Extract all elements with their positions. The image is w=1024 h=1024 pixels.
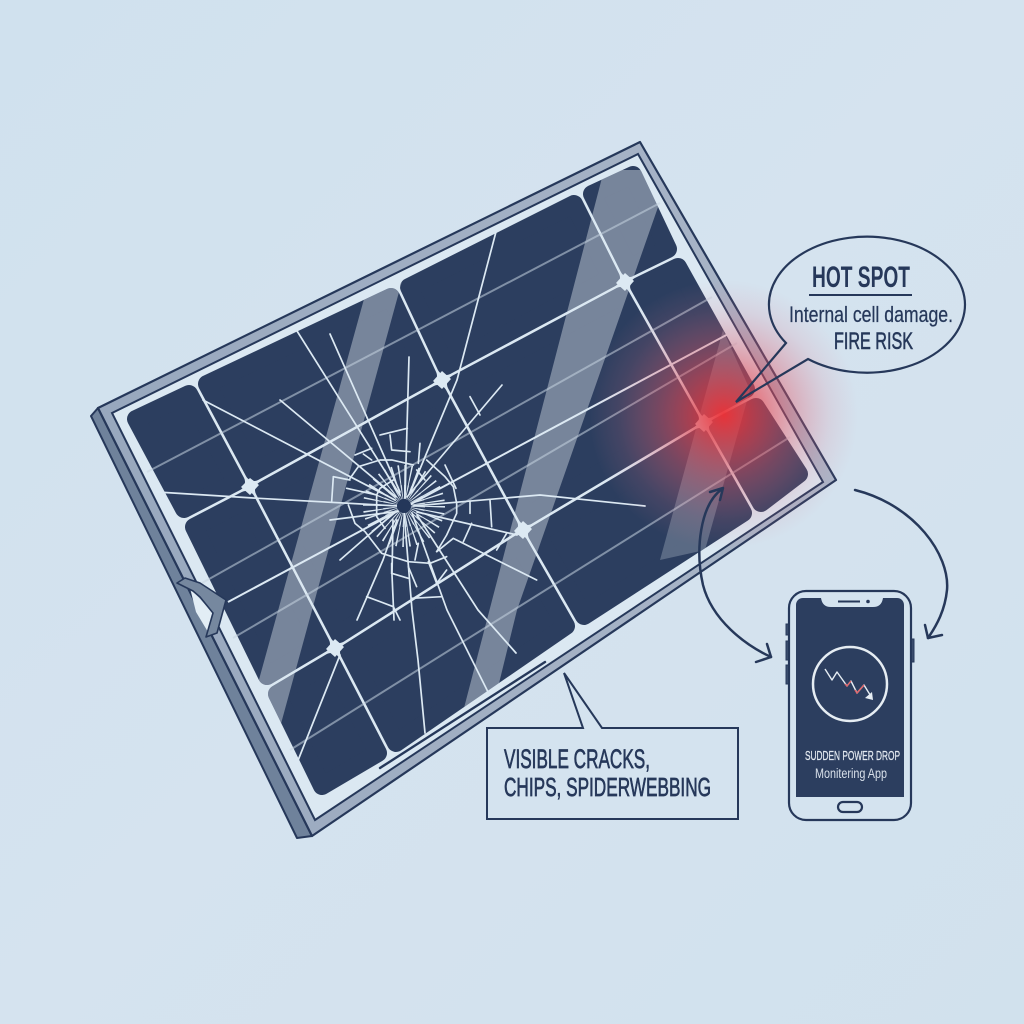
solar cells bbox=[136, 175, 799, 786]
bright conductor line bbox=[228, 332, 732, 602]
monitoring app label: Monitering App bbox=[815, 766, 887, 781]
falling power line bbox=[825, 669, 872, 698]
impact hole bbox=[397, 499, 411, 513]
arrow head bbox=[865, 692, 873, 700]
arrow: phone and panel two-way bbox=[699, 488, 771, 662]
spiderweb crack rings bbox=[332, 397, 537, 620]
phone body bbox=[789, 591, 911, 820]
label text line 2: CHIPS, SPIDERWEBBING bbox=[504, 772, 711, 802]
panel frame bbox=[98, 142, 836, 836]
speaker and camera bbox=[838, 600, 870, 603]
power drop gauge bbox=[813, 647, 887, 721]
phone side buttons bbox=[786, 624, 914, 684]
panel glass face bbox=[112, 154, 823, 820]
impact radial cracks bbox=[380, 482, 428, 530]
phone screen bbox=[796, 598, 904, 797]
red drop segment lower bbox=[855, 685, 864, 693]
cell junction nodes bbox=[241, 273, 713, 657]
arrow: panel to phone bbox=[855, 490, 947, 638]
speech bubble bbox=[736, 237, 965, 402]
infographic: damaged solar panel warning signs bbox=[90, 140, 966, 839]
hot spot glow bbox=[589, 280, 859, 550]
chip gap bbox=[190, 588, 213, 632]
hot spot heading: HOT SPOT bbox=[812, 261, 910, 294]
busbar lines bbox=[147, 203, 790, 750]
home button bbox=[838, 802, 862, 812]
phone monitoring app bbox=[786, 591, 914, 820]
callout: hot spot bbox=[736, 237, 965, 402]
long cracks bbox=[157, 228, 645, 763]
panel side edge bbox=[91, 408, 312, 838]
red drop segments bbox=[845, 681, 851, 686]
broken frame piece bbox=[177, 578, 226, 637]
corner chip bbox=[177, 578, 226, 637]
label text line 1: VISIBLE CRACKS, bbox=[504, 744, 650, 774]
inner frame dark line bbox=[380, 662, 545, 768]
callout: visible cracks bbox=[487, 673, 738, 819]
fire risk label: FIRE RISK bbox=[834, 328, 913, 355]
glass reflection bands bbox=[252, 170, 750, 742]
gauge ring bbox=[813, 647, 887, 721]
heading rule bbox=[809, 294, 912, 296]
solar panel bbox=[91, 142, 836, 838]
hot spot description: Internal cell damage. bbox=[789, 302, 953, 327]
label box with pointer bbox=[487, 673, 738, 819]
sudden power drop label: SUDDEN POWER DROP bbox=[805, 748, 900, 763]
